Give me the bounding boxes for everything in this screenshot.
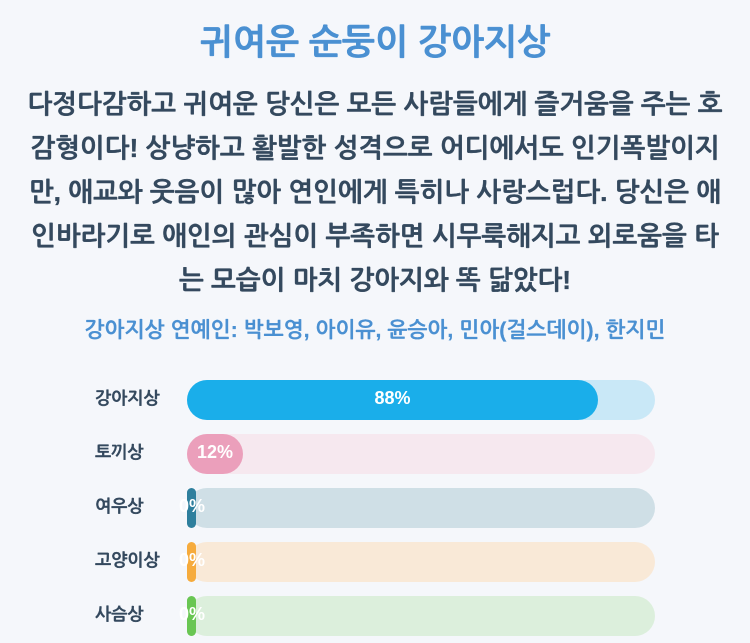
bar row: 강아지상 88% <box>95 380 655 420</box>
fill <box>187 488 196 528</box>
track <box>187 596 655 636</box>
fill <box>187 380 598 420</box>
bar row: 여우상 0% <box>95 488 655 528</box>
track <box>187 542 655 582</box>
track <box>187 434 655 474</box>
label: 토끼상: 토끼상 <box>95 442 143 462</box>
track <box>187 488 655 528</box>
track <box>187 380 655 420</box>
bar row: 사슴상 0% <box>95 596 655 636</box>
bar row: 고양이상 0% <box>95 542 655 582</box>
description text: 인바라기로 애인의 관심이 부족하면 시무룩해지고 외로움을 타 <box>31 221 719 251</box>
fill <box>187 434 243 474</box>
title: 귀여운 순둥이 강아지상 <box>200 23 550 62</box>
fill <box>187 596 196 636</box>
value: 0% <box>179 550 205 570</box>
description text: 다정다감하고 귀여운 당신은 모든 사람들에게 즐거움을 주는 호 <box>27 89 723 119</box>
label: 강아지상: 강아지상 <box>95 388 160 408</box>
label: 사슴상: 사슴상 <box>95 604 143 624</box>
value: 88% <box>374 388 411 408</box>
celebrities line: 강아지상 연예인: 박보영, 아이유, 윤승아, 민아(걸스데이), 한지민 <box>85 318 665 342</box>
value: 0% <box>179 604 205 624</box>
label: 고양이상: 고양이상 <box>95 550 160 570</box>
bar row: 토끼상 12% <box>95 434 655 474</box>
value: 0% <box>179 496 205 516</box>
value: 12% <box>197 442 233 462</box>
description text: 는 모습이 마치 강아지와 똑 닮았다! <box>179 265 571 295</box>
label: 여우상: 여우상 <box>95 496 143 516</box>
description text <box>27 89 723 295</box>
description text: 만, 애교와 웃음이 많아 연인에게 특히나 사랑스럽다. 당신은 애 <box>29 177 721 207</box>
fill <box>187 542 196 582</box>
description text: 감형이다! 상냥하고 활발한 성격으로 어디에서도 인기폭발이지 <box>30 133 720 163</box>
